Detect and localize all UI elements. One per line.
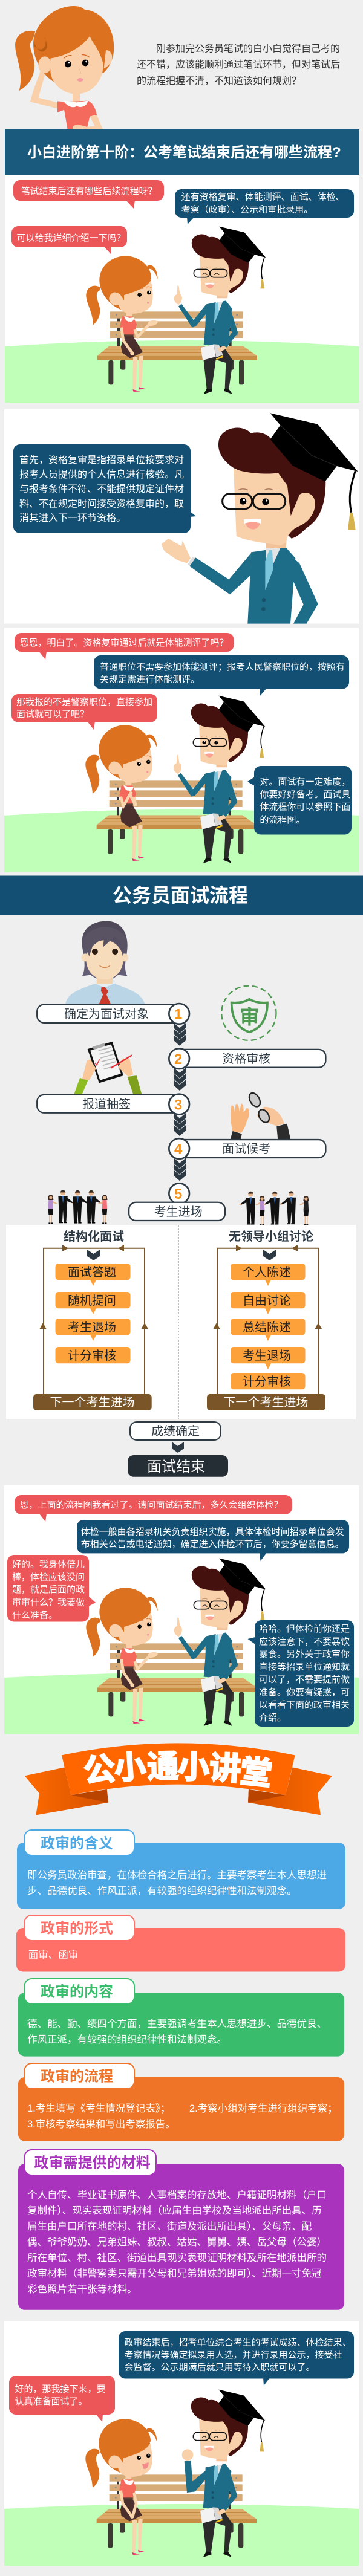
loop: structured interview: 随机提问 bbox=[68, 1294, 116, 1308]
speech bubble: girl will prepare: 好的，那我接下来，要 bbox=[15, 2384, 106, 2394]
heading banner: interview flow bbox=[0, 875, 363, 915]
speech bubble: asks about political review: 什么准备。 bbox=[12, 1611, 57, 1620]
speech bubble: qualification review explanation: 报考人员提供的个人信息进行核验。凡 bbox=[19, 469, 184, 480]
step: interview ends bbox=[128, 1455, 228, 1477]
speech bubble: when is the physical exam: 恩，上面的流程图我看过了。请问面试结束后，多久会组织体检？ bbox=[19, 1500, 283, 1510]
speech bubble: physical test answer: 关规定需进行体能测评。 bbox=[100, 675, 200, 684]
intro paragraph: 还不错，应该能顺利通过笔试环节，但对笔试后 bbox=[137, 59, 340, 70]
step 1: confirmed for interview: 确定为面试对象 bbox=[64, 1007, 149, 1021]
step 3: check-in and draw lots: 3 bbox=[174, 1097, 182, 1113]
speech bubble: physical exam answer bbox=[77, 1520, 349, 1561]
tab title bbox=[24, 2150, 156, 2175]
speech bubble: qualification review explanation: 与报考条件不符、不能提供规定证件材 bbox=[19, 484, 184, 495]
intro paragraph: 刚参加完公务员笔试的白小白觉得自己考的 bbox=[156, 44, 340, 54]
step 2: qualification review: 2 bbox=[174, 1052, 182, 1068]
loop: structured interview: 考生退场 bbox=[68, 1320, 116, 1334]
teacher with graduation cap, finger raised bbox=[174, 227, 266, 394]
girl sitting, open hand bbox=[86, 1588, 158, 1724]
panel: closing dialogue bbox=[4, 2321, 359, 2566]
card: materials required: 政审材料（非警察类只需开父母和兄弟姐妹的即可）、近期一寸免冠 bbox=[27, 2268, 322, 2279]
teacher, eyes open, finger raised bbox=[174, 696, 265, 863]
card: meaning of political review: 步、品德优良、作风正派，有较强的组织纪律性和法制观念。 bbox=[27, 1884, 296, 1896]
step 4: waiting for interview: 4 bbox=[174, 1142, 183, 1158]
heading banner: stage ten: 小白进阶第十阶：公考笔试结束后还有哪些流程? bbox=[27, 144, 341, 161]
card: materials required: 个人自传、毕业证书原件、人事档案的存放地、户籍证明材料（户口 bbox=[27, 2189, 327, 2201]
speech bubble: advice before physical exam: 直接等招录单位通知就 bbox=[259, 1661, 350, 1672]
step: interview ends: 面试结束 bbox=[147, 1459, 205, 1475]
loop: structured interview: 下一个考生进场 bbox=[50, 1395, 134, 1409]
loop: leaderless group discussion: 下一个考生进场 bbox=[224, 1395, 309, 1409]
loop: structured interview: 计分审核 bbox=[68, 1349, 116, 1363]
speech bubble: teacher points to the flow chart bbox=[247, 766, 352, 834]
speech bubble: asks about political review: 棒，体检应该没问 bbox=[12, 1572, 85, 1583]
speech bubble: qualification review explanation: 料、不在规定时间接受资格复审的，取 bbox=[19, 498, 184, 509]
step 3: check-in and draw lots bbox=[37, 1094, 189, 1114]
tab title bbox=[24, 1979, 134, 2004]
subheading: structured interview: 结构化面试 bbox=[64, 1230, 124, 1244]
girl sitting, smiling bbox=[85, 2419, 157, 2555]
speech bubble: teacher points to the flow chart: 体流程你可以参照下面 bbox=[260, 802, 350, 813]
intro: worried girl scratching her head bbox=[15, 6, 114, 129]
panel: two interview formats background bbox=[6, 1225, 356, 1419]
step 2: qualification review: 资格审核 bbox=[222, 1052, 270, 1066]
step 5: candidate enters: 5 bbox=[174, 1187, 182, 1202]
panel: opening dialogue scene bbox=[5, 129, 359, 403]
speech bubble: girl will prepare: 认真准备面试了。 bbox=[15, 2396, 88, 2407]
card: content of political review: 作风正派，有较强的组织纪律性和法制观念。 bbox=[27, 2033, 227, 2045]
speech bubble: teacher answers: 考察（政审）、公示和审批录用。 bbox=[182, 204, 313, 215]
speech bubble: qualification review explanation bbox=[13, 444, 196, 533]
card: meaning of political review: 即公务员政治审查，在体检合格之后进行。主要考察考生本人思想进 bbox=[27, 1869, 327, 1881]
speech bubble: physical test answer bbox=[94, 655, 349, 696]
card: content of political review bbox=[18, 1979, 344, 2057]
card: materials required: 届生由户口所在地的村、社区、街道及派出所出具）、父母亲、配 bbox=[27, 2221, 312, 2232]
speech bubble: asks about political review bbox=[7, 1555, 96, 1621]
park bench bbox=[97, 780, 257, 854]
arrow: to interview end bbox=[172, 1442, 184, 1453]
card: materials required: 彩色照片若干张等材料。 bbox=[27, 2283, 137, 2295]
speech bubble: teacher answers: 还有资格复审、体能测评、面试、体检、 bbox=[182, 191, 345, 202]
speech bubble: physical exam answer: 体检一般由各招录机关负责组织实施，具体体检时间招录单位会发 bbox=[81, 1527, 344, 1537]
teacher, raised fist bbox=[182, 2390, 265, 2557]
loop: leaderless group discussion: 个人陈述 bbox=[243, 1265, 291, 1279]
chevron arrows between steps bbox=[174, 1023, 186, 1181]
speech bubble: girl confirms bbox=[15, 633, 234, 660]
park bench bbox=[97, 1643, 257, 1716]
speech bubble: advice before physical exam: 准备。你要有疑惑，可 bbox=[259, 1687, 350, 1698]
loop: leaderless group discussion bbox=[207, 1245, 325, 1410]
intro paragraph bbox=[137, 44, 340, 86]
icon: clipboard in hands bbox=[74, 1042, 142, 1094]
speech bubble: asks about political review: 好的。我身体倍儿 bbox=[12, 1559, 85, 1569]
speech bubble: girl asks for detail bbox=[11, 226, 127, 254]
step 1: confirmed for interview bbox=[37, 1004, 189, 1024]
speech bubble: teacher points to the flow chart: 你要好好备考。面试具 bbox=[260, 790, 350, 800]
panel: physical test and interview dialogue bbox=[4, 628, 359, 872]
tab title: 政审的含义 bbox=[41, 1835, 113, 1852]
tab title bbox=[24, 1915, 134, 1941]
loop: leaderless group discussion: 考生退场 bbox=[243, 1349, 291, 1363]
ribbon banner: lecture title: 公小通小讲堂 bbox=[82, 1749, 273, 1792]
speech bubble: girl will prepare bbox=[9, 2376, 115, 2422]
step 1: confirmed for interview: 1 bbox=[174, 1007, 182, 1023]
speech bubble: asks about political review: 题，就是后面的政 bbox=[12, 1585, 85, 1595]
teacher, eyes smiling bbox=[174, 1559, 266, 1726]
card: procedure of political review bbox=[18, 2063, 344, 2141]
tab title bbox=[24, 1830, 134, 1855]
speech bubble: advice before physical exam: 可以了，不需要提前做 bbox=[259, 1675, 350, 1685]
card: materials required: 偶、爷爷奶奶、兄弟姐妹、叔叔、姑姑、舅舅、姨、岳父母（公婆） bbox=[27, 2236, 327, 2248]
step: score confirmed: 成绩确定 bbox=[151, 1424, 200, 1438]
speech bubble: teacher answers bbox=[175, 189, 354, 224]
step 4: waiting for interview: 面试候考 bbox=[222, 1142, 270, 1156]
speech bubble: girl asks: 笔试结束后还有哪些后续流程呀？ bbox=[21, 186, 157, 196]
loop: leaderless group discussion: 自由讨论 bbox=[243, 1294, 291, 1308]
loop: structured interview: 面试答题 bbox=[68, 1265, 116, 1279]
speech bubble: asks about political review: 审审什么？我要做 bbox=[12, 1597, 85, 1608]
speech bubble: advice before physical exam: 暴食。另外关于政审你 bbox=[259, 1649, 350, 1659]
speech bubble: girl asks bbox=[13, 180, 164, 209]
card: materials required: 复制件）、现实表现证明材料（应届生由学校及当地派出所出具、历 bbox=[27, 2205, 322, 2216]
speech bubble: advice before physical exam: 以看看下面的政审相关 bbox=[259, 1700, 350, 1710]
step 5: candidate enters bbox=[129, 1183, 225, 1221]
speech bubble: when is the physical exam bbox=[15, 1495, 292, 1522]
step 2: qualification review bbox=[169, 1048, 325, 1069]
tab title: 政审需提供的材料 bbox=[34, 2155, 151, 2172]
speech bubble: girl asks about interview: 那我报的不是警察职位，直接参加 bbox=[16, 696, 152, 707]
card: form of political review: 面审、函审 bbox=[28, 1949, 78, 1961]
icon: hands with glasses bbox=[231, 1091, 290, 1139]
speech bubble: final steps after review: 政审结束后，招考单位综合考生的考试成绩、体检结果、 bbox=[125, 2337, 352, 2347]
tab title bbox=[24, 2063, 134, 2089]
tab title: 政审的流程 bbox=[41, 2069, 113, 2084]
loop: leaderless group discussion: 总结陈述 bbox=[243, 1320, 291, 1334]
flow chart: interview process bbox=[6, 921, 356, 1477]
park bench bbox=[97, 311, 257, 384]
speech bubble: qualification review explanation: 首先，资格复审是指招录单位按要求对 bbox=[19, 455, 184, 466]
card: form of political review bbox=[16, 1915, 345, 1972]
card: procedure of political review: 2.考察小组对考生进行组织考察； bbox=[189, 2103, 338, 2114]
card: meaning of political review bbox=[17, 1830, 345, 1909]
card: procedure of political review: 3.审核考察结果和写出考察报告。 bbox=[27, 2118, 175, 2130]
upper flow steps bbox=[37, 921, 325, 1225]
speech bubble: girl asks for detail: 可以给我详细介绍一下吗？ bbox=[17, 233, 126, 243]
intro paragraph: 的流程把握不清，不知道该如何规划？ bbox=[137, 76, 301, 86]
speech bubble: qualification review explanation: 消其进入下一环节资格。 bbox=[19, 513, 126, 524]
speech bubble: final steps after review bbox=[119, 2331, 354, 2386]
card: content of political review: 德、能、勤、绩四个方面，主要强调考生本人思想进步、品德优良、 bbox=[27, 2018, 327, 2029]
step 4: waiting for interview bbox=[169, 1138, 325, 1159]
loop: structured interview bbox=[33, 1245, 152, 1410]
step 3: check-in and draw lots: 报道抽签 bbox=[82, 1097, 131, 1111]
icon: review seal bbox=[221, 986, 276, 1040]
speech bubble: advice before physical exam: 哈哈。但体检前你还是 bbox=[259, 1624, 350, 1634]
speech bubble: girl asks about interview: 面试就可以了吧？ bbox=[16, 709, 89, 719]
large teacher figure bbox=[162, 413, 358, 624]
speech bubble: physical exam answer: 布相关公告或电话通知，确定进入体检环节后，你要多留意信息。 bbox=[81, 1539, 344, 1549]
card: materials required bbox=[18, 2150, 344, 2310]
panel: physical exam and political review dialogue bbox=[4, 1485, 359, 1734]
card: procedure of political review: 1.考生填写《考生情况登记表》； bbox=[27, 2103, 171, 2114]
icon: candidate portrait bbox=[65, 921, 145, 1004]
speech bubble: advice before physical exam: 介绍。 bbox=[259, 1713, 286, 1723]
tab title: 政审的形式 bbox=[41, 1920, 113, 1937]
park bench bbox=[97, 2474, 257, 2548]
step: score confirmed bbox=[130, 1422, 221, 1440]
speech bubble: final steps after review: 考察情况等确定拟录用人选，并进行录用公示，接受社 bbox=[125, 2349, 342, 2360]
speech bubble: teacher points to the flow chart: 的流程图。 bbox=[260, 815, 305, 825]
heading banner: stage ten bbox=[5, 129, 359, 175]
speech bubble: girl asks about interview bbox=[11, 694, 157, 730]
ribbon banner: lecture title bbox=[25, 1743, 332, 1815]
icon: review seal: 审 bbox=[240, 1005, 260, 1028]
speech bubble: advice before physical exam bbox=[248, 1620, 354, 1727]
speech bubble: final steps after review: 会监督。公示期满后就只用等待入职就可以了。 bbox=[125, 2361, 315, 2372]
panel: teacher explains qualification review bbox=[4, 409, 359, 624]
girl sitting, open hand bbox=[86, 256, 158, 392]
loop: leaderless group discussion: 计分审核 bbox=[243, 1375, 291, 1389]
speech bubble: teacher points to the flow chart: 对。面试有一定难度， bbox=[260, 777, 350, 787]
step 5: candidate enters: 考生进场 bbox=[154, 1205, 203, 1219]
tab title: 政审的内容 bbox=[41, 1984, 113, 2000]
speech bubble: advice before physical exam: 应该注意下，不要暴饮 bbox=[259, 1636, 350, 1647]
icon: right interview group bbox=[240, 1191, 309, 1225]
subheading: leaderless group discussion: 无领导小组讨论 bbox=[229, 1230, 313, 1244]
speech bubble: girl confirms: 恩恩，明白了。资格复审通过后就是体能测评了吗？ bbox=[19, 637, 229, 648]
girl sitting, hand on chin bbox=[85, 725, 157, 861]
icon: left interview group bbox=[48, 1190, 108, 1224]
speech bubble: physical test answer: 普通职位不需要参加体能测评；报考人民警察职位的，按照有 bbox=[100, 661, 345, 672]
card: materials required: 所在单位、村、社区、街道出具现实表现证明材料及所在地派出所的 bbox=[27, 2252, 327, 2263]
heading banner: interview flow: 公务员面试流程 bbox=[113, 884, 248, 906]
